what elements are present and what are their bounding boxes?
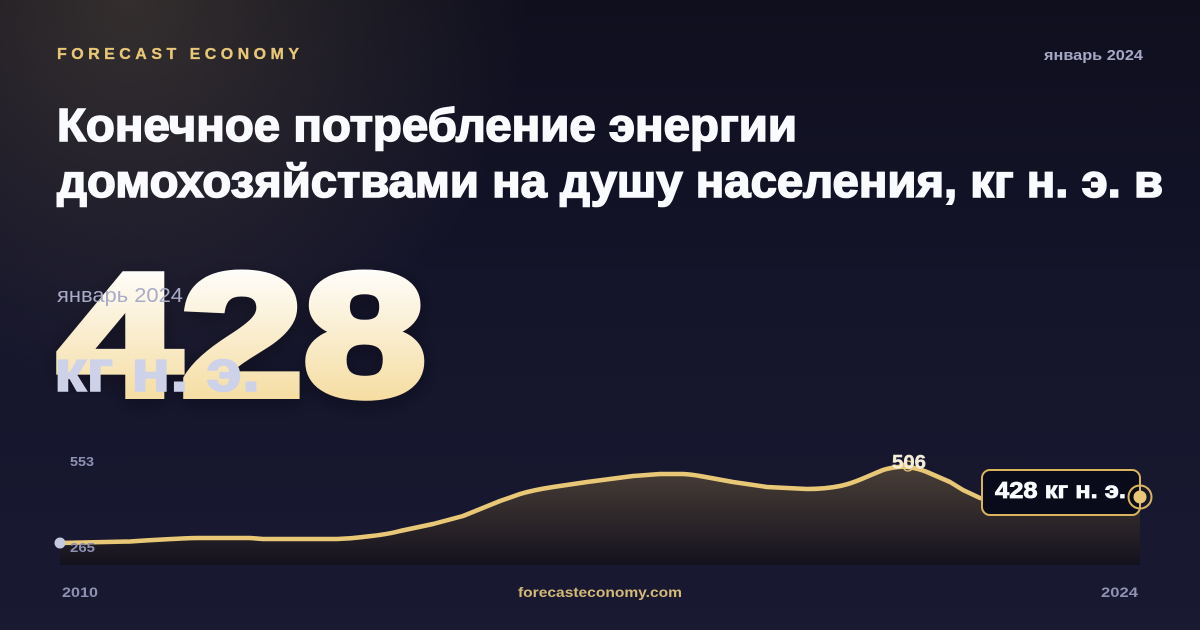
chart	[54, 452, 1152, 565]
title	[57, 99, 1163, 207]
title: Конечное потребление энергии	[57, 99, 797, 151]
start point	[54, 538, 66, 548]
date top right: январь 2024	[1044, 47, 1144, 64]
trend line	[60, 467, 1000, 543]
x axis end: 2024	[1101, 584, 1138, 600]
current value marker	[1128, 486, 1152, 508]
source link: forecasteconomy.com	[518, 584, 682, 600]
unit label: кг н. э.	[54, 339, 260, 404]
y axis max: 553	[70, 454, 94, 469]
y axis min: 265	[70, 540, 95, 555]
big value: 428	[58, 237, 426, 432]
date subtitle: январь 2024	[57, 285, 183, 307]
peak label: 506	[892, 452, 926, 474]
x axis start: 2010	[62, 584, 98, 600]
title: домохозяйствами на душу населения, кг н. э. в	[57, 155, 1163, 207]
peak marker	[903, 461, 913, 471]
brand label: FORECAST ECONOMY	[57, 46, 299, 63]
callout	[982, 470, 1140, 515]
area under line	[60, 467, 1140, 565]
callout: 428 кг н. э.	[995, 477, 1126, 503]
